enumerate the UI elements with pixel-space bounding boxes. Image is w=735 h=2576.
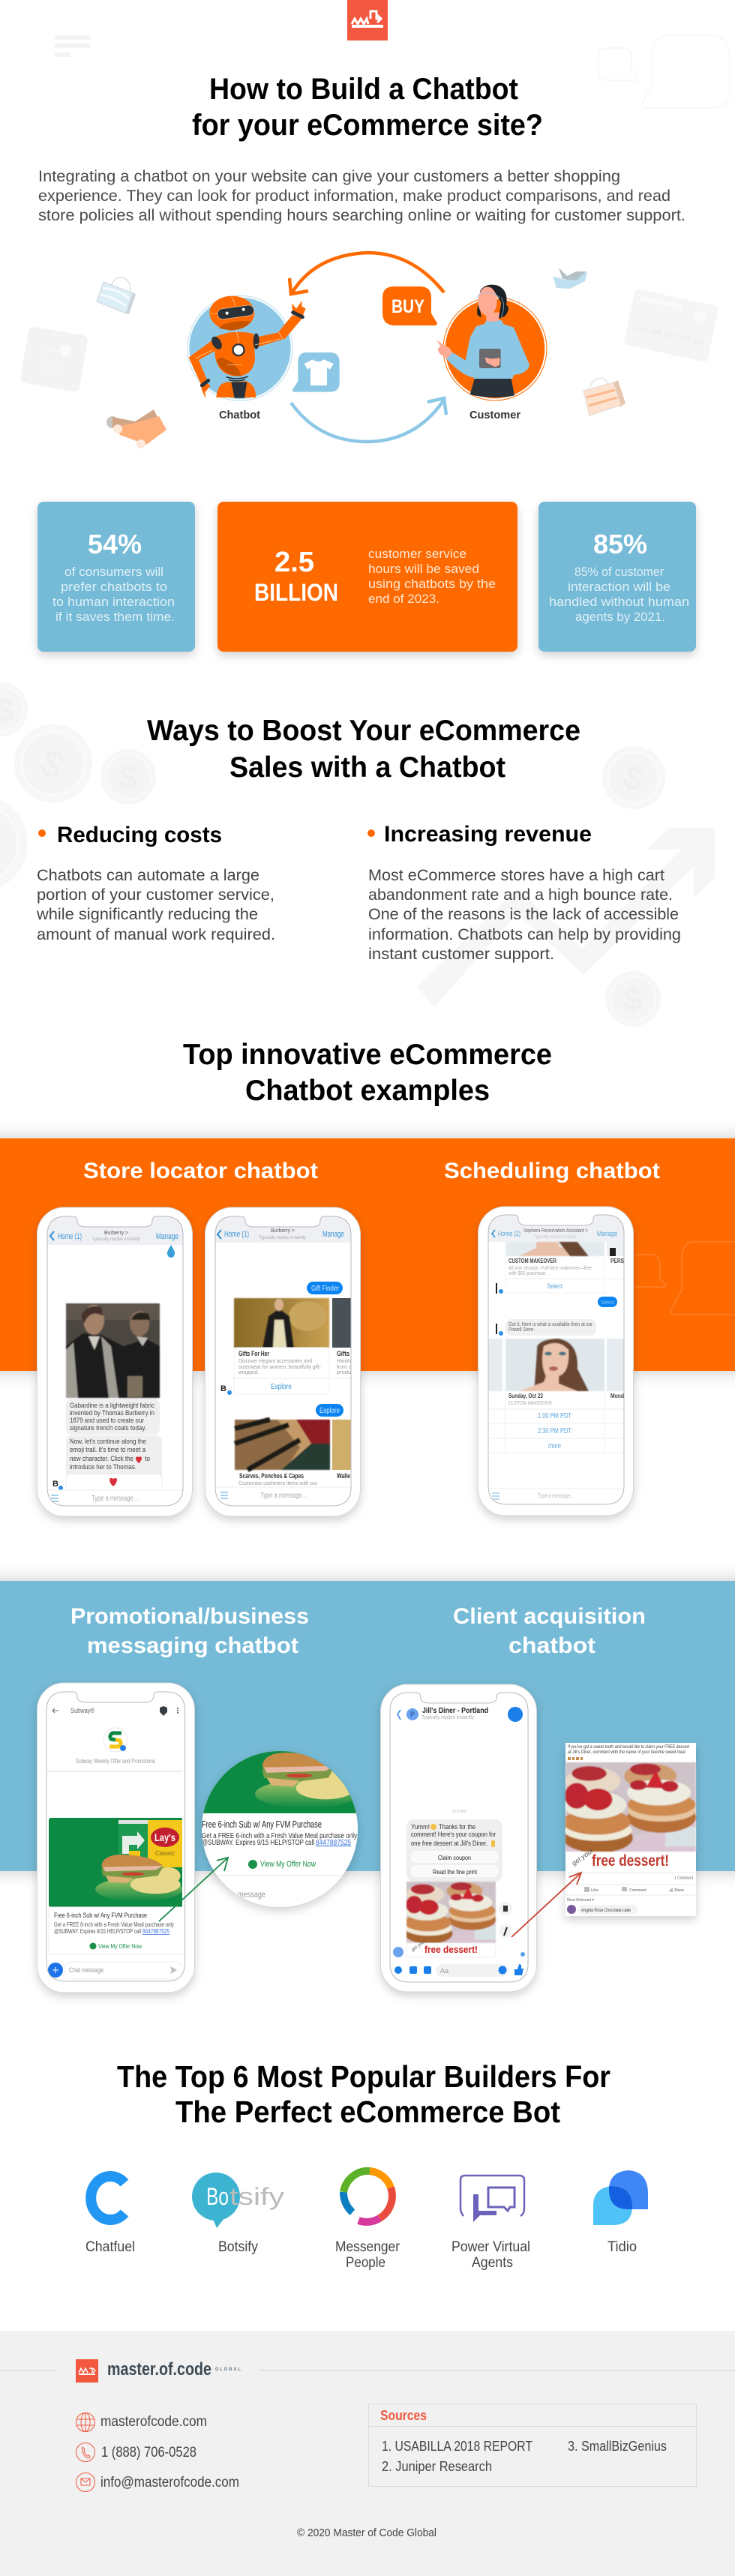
heading: ways to boost: Ways to Boost Your eCommerce xyxy=(147,715,580,747)
phone: store locator 1: Type a message... xyxy=(92,1495,138,1503)
phone: scheduling: 45 min session. Full-face makeover—free xyxy=(508,1266,592,1271)
phone: store locator 1 xyxy=(38,1207,192,1516)
contact: phone: 1 (888) 706-0528 xyxy=(101,2445,196,2461)
chatbot illustration xyxy=(188,295,306,400)
phone: client acquisition: Typically replies instantly xyxy=(422,1714,474,1720)
facebook post card: Comment xyxy=(629,1888,646,1893)
column: increasing revenue: Increasing revenue xyxy=(384,822,592,847)
orange band xyxy=(0,1138,735,1371)
phone: store locator 2 xyxy=(206,1207,360,1516)
photo: gifts for her xyxy=(234,1298,329,1348)
arrow: orange from customer to chatbot xyxy=(290,253,444,294)
blue band xyxy=(0,1581,735,1871)
heading: top 6 builders: The Top 6 Most Popular Builders For xyxy=(117,2059,610,2094)
decorative coins xyxy=(0,682,665,1027)
phone: scheduling: Typically replies instantly xyxy=(534,1235,577,1240)
phone: client acquisition: 10:50 AM xyxy=(452,1810,466,1814)
phone: client acquisition: Yumm! xyxy=(411,1823,430,1831)
copyright: © 2020 Master of Code Global xyxy=(297,2527,436,2539)
builder: Tidio: Tidio xyxy=(608,2239,637,2255)
phone: subway promotion: Free 6-inch Sub w/ Any FVM Purchase xyxy=(54,1912,147,1919)
heading: client acquisition chatbot: Client acquisition xyxy=(453,1604,646,1629)
phone: scheduling: Sephora Reservation Assistant > xyxy=(524,1228,588,1234)
contact: email: info@masterofcode.com xyxy=(100,2475,239,2491)
heading: top innovative xyxy=(183,1039,552,1107)
facebook post card: Angela Rose Chocolate cake xyxy=(581,1908,631,1913)
icon: cart tile xyxy=(20,326,88,392)
promo image: Lay's xyxy=(154,1831,176,1843)
photo: two men xyxy=(66,1303,160,1398)
sources box: 1. USABILLA 2018 REPORT xyxy=(382,2439,532,2454)
label: customer: Customer xyxy=(470,409,520,421)
phone: store locator 2: wrapped. xyxy=(238,1369,259,1375)
contact: website: masterofcode.com xyxy=(100,2414,207,2430)
phone: store locator 2: Walle xyxy=(337,1472,350,1480)
decorative coins: $ xyxy=(119,760,137,796)
phone: client acquisition xyxy=(381,1684,537,1992)
phone: store locator 1: signature trench coats today. xyxy=(70,1424,146,1432)
icon: orange handshake xyxy=(106,409,166,448)
stat card: 54% xyxy=(38,502,195,652)
heading: ways to boost xyxy=(147,715,580,784)
stat card: 54%: if it saves them time. xyxy=(56,610,175,624)
intro text xyxy=(38,168,686,224)
promo image: Classic xyxy=(155,1850,175,1857)
facebook post card: 1 Comment xyxy=(674,1876,693,1881)
stat card: 85%: 85% of customer xyxy=(574,565,664,579)
icon: orange shopping bag xyxy=(584,378,626,415)
arrow: blue from chatbot to customer xyxy=(291,398,446,442)
contact: website xyxy=(76,2413,207,2431)
phone: store locator 1: invented by Thomas Burberry in xyxy=(70,1409,154,1417)
heading: promotional messaging chatbot: messaging chatbot xyxy=(87,1633,298,1658)
title: for your eCommerce site? xyxy=(192,109,543,142)
phone: scheduling: more xyxy=(548,1442,561,1450)
phone: scheduling: Mond xyxy=(610,1393,624,1399)
phone: subway promotion: @SUBWAY. Expires 9/15 HELP/STOP call xyxy=(54,1928,141,1935)
phone: subway promotion: Subway® xyxy=(70,1707,94,1714)
phone: store locator 2: Customise cashmere items with our xyxy=(238,1480,317,1486)
phone: store locator 2: Explore xyxy=(271,1383,292,1391)
phone: client acquisition: Claim coupon xyxy=(438,1854,471,1861)
phone: client acquisition: one free dessert at Jill's Diner. xyxy=(411,1840,488,1847)
phone: client acquisition: get your xyxy=(411,1939,428,1953)
phone: store locator 1: Gabardine is a lightweight fabric xyxy=(70,1402,154,1410)
photo: model face xyxy=(488,1339,624,1391)
decorative lines icon xyxy=(55,35,91,57)
phone: scheduling: Sunday, Oct 23 xyxy=(508,1393,543,1399)
phone: subway promotion: Get a FREE 6-inch with a Fresh Value Meal purchase only xyxy=(54,1921,174,1928)
facebook post card: get your xyxy=(570,1846,596,1867)
column: increasing revenue: information. Chatbots can help by providing xyxy=(368,926,681,943)
phone: store locator 1: Home (1) xyxy=(58,1232,82,1241)
heading: client acquisition chatbot: chatbot xyxy=(508,1633,596,1658)
phone: subway promotion: Subway Weekly Offer and Promotions xyxy=(76,1758,155,1765)
stat card: 2.5 billion xyxy=(218,502,518,652)
heading: store locator chatbot: Store locator chatbot xyxy=(83,1159,318,1183)
phone: client acquisition: P xyxy=(410,1711,415,1718)
phone: client acquisition: free dessert! xyxy=(424,1944,478,1955)
phone: store locator 2: Explore xyxy=(320,1407,340,1415)
decorative speech bubbles xyxy=(598,35,730,108)
column: reducing costs xyxy=(36,823,275,943)
stat card: 85%: handled without human xyxy=(549,595,689,609)
phone: store locator 1: Manage xyxy=(156,1232,178,1241)
phone: scheduling: PERS xyxy=(610,1258,625,1264)
decorative coins: $ xyxy=(617,758,650,799)
phone: store locator 2: B xyxy=(220,1384,226,1393)
stat card: 2.5 billion: end of 2023. xyxy=(368,592,440,606)
customer illustration xyxy=(436,285,547,400)
phone: scheduling: CUSTOM MAKEOVER xyxy=(508,1258,556,1264)
phone: store locator 1: Burberry > xyxy=(104,1229,129,1236)
stat card: 85%: agents by 2021. xyxy=(575,610,665,624)
phone: scheduling: 2:30 PM PDT xyxy=(538,1427,572,1435)
stat card: 85%: 85% xyxy=(593,529,647,559)
photo: top model xyxy=(506,1242,604,1256)
phone: subway promotion: 8447887525 xyxy=(142,1928,170,1935)
column: reducing costs: Chatbots can automate a large xyxy=(37,867,260,884)
stat card: 2.5 billion: BILLION xyxy=(254,579,338,606)
facebook post card: free dessert! xyxy=(592,1852,669,1870)
BUY speech bubble xyxy=(382,286,437,325)
facebook post card: at Jill's Diner, comment with the name of your favorite sweet treat xyxy=(568,1750,686,1755)
icon: blue handshake xyxy=(553,268,587,289)
phone: scheduling: Select xyxy=(601,1300,614,1306)
builder: Botsify: tsify xyxy=(230,2183,284,2210)
arrow: red xyxy=(512,1873,581,1937)
builder: Tidio xyxy=(593,2170,648,2255)
stat card: 85% xyxy=(538,502,696,652)
phone: store locator 2: Gift Finder xyxy=(311,1285,340,1293)
heading: top 6 builders: The Perfect eCommerce Bot xyxy=(176,2095,560,2129)
phone: client acquisition: Read the fine print xyxy=(433,1868,478,1876)
phone: scheduling: Home (2) xyxy=(498,1230,520,1237)
column: reducing costs: Reducing costs xyxy=(57,823,222,847)
phone: store locator 1: Typically replies instantly xyxy=(92,1237,141,1242)
phone: store locator 2: Discover elegant accessories and xyxy=(238,1357,312,1364)
builder: MessengerPeople xyxy=(335,2171,400,2271)
decorative coins: $ xyxy=(34,741,70,787)
builder: Power Virtual Agents: Power Virtual xyxy=(452,2239,530,2255)
column: increasing revenue: abandonment rate and a high bounce rate. xyxy=(368,886,673,904)
builder: Chatfuel xyxy=(86,2176,135,2255)
phone: store locator 1: emoji trail. It's time to meet a xyxy=(70,1446,146,1454)
footer panel xyxy=(0,2331,735,2576)
builder: Power Virtual Agents: Agents xyxy=(472,2255,513,2271)
facebook post card: Share xyxy=(674,1888,684,1893)
column: increasing revenue: Most eCommerce stores have a high cart xyxy=(368,867,664,884)
stat card: 2.5 billion: customer service xyxy=(368,547,466,561)
arrow: green xyxy=(159,1858,228,1921)
footer logo xyxy=(76,2359,241,2383)
phone: client acquisition: Jill's Diner - Portland xyxy=(422,1707,488,1715)
zoom callout circle xyxy=(195,1747,364,1907)
contact: email xyxy=(76,2473,239,2491)
BUY speech bubble: BUY xyxy=(392,296,424,317)
stat card: 2.5 billion: using chatbots by the xyxy=(368,577,496,591)
contact: phone xyxy=(76,2443,196,2461)
facebook post card: Most Relevant ▾ xyxy=(567,1898,594,1903)
builder: MessengerPeople: People xyxy=(346,2255,386,2271)
phone: subway promotion xyxy=(38,1683,195,1993)
zoom callout circle: Free 6-inch Sub w/ Any FVM Purchase xyxy=(202,1819,322,1830)
sources box: Sources xyxy=(380,2408,427,2423)
phone: store locator 2: Manage xyxy=(322,1230,344,1239)
phone: scheduling xyxy=(478,1207,633,1516)
stat card: 54%: prefer chatbots to xyxy=(61,580,167,594)
phone: scheduling: Got it. Here is what is available then at our xyxy=(508,1321,592,1327)
column: increasing revenue xyxy=(368,822,681,963)
decorative bubbles on orange xyxy=(634,1242,735,1315)
footer logo: master.of.code xyxy=(107,2359,212,2380)
column: increasing revenue: instant customer support. xyxy=(368,946,554,963)
builder: Botsify xyxy=(192,2173,284,2255)
phone: store locator 1: 1879 and used to create our xyxy=(70,1417,144,1425)
phone: store locator 2: Hands xyxy=(337,1357,351,1364)
phone: store locator 2: Type a message... xyxy=(260,1492,307,1500)
phone: scheduling: Powell Store. xyxy=(508,1326,535,1333)
phone: store locator 1: to xyxy=(145,1455,150,1463)
phone: store locator 1: Now, let's continue along the xyxy=(70,1438,146,1446)
phone: store locator 1: B xyxy=(52,1480,58,1489)
icon: subway logo xyxy=(104,1728,128,1752)
stat card: 54%: of consumers will xyxy=(64,565,164,579)
zoom callout circle: View My Offer Now xyxy=(260,1860,316,1869)
builder: Power Virtual Agents xyxy=(452,2176,530,2271)
decorative coins: $ xyxy=(624,982,642,1018)
phone: scheduling: 1:00 PM PDT xyxy=(538,1412,572,1420)
phone: store locator 2: from c xyxy=(337,1363,351,1370)
decorative growth arrow xyxy=(417,828,715,1007)
header logo xyxy=(347,0,388,40)
phone: store locator 2: Home (1) xyxy=(224,1230,249,1239)
photo: scarves xyxy=(235,1420,330,1470)
phone: scheduling: CUSTOM MAKEOVER xyxy=(508,1401,552,1406)
t-shirt speech bubble xyxy=(292,352,340,392)
title: How to Build a Chatbot xyxy=(209,73,518,106)
facebook post card: Like xyxy=(591,1888,598,1893)
zoom callout circle: message xyxy=(238,1889,266,1900)
icon: credit card: 124 456 367 789 123 xyxy=(634,324,705,346)
phone: store locator 2: produ xyxy=(337,1369,351,1375)
intro text: Integrating a chatbot on your website can give your customers a better shopping xyxy=(38,168,620,185)
promo image xyxy=(49,1818,183,1907)
builder: Botsify: Bo xyxy=(206,2183,229,2210)
phone: store locator 2: outerwear for women, beautifully gift- xyxy=(238,1363,321,1370)
phone: store locator 2: Scarves, Ponchos & Capes xyxy=(239,1472,304,1480)
stat card: 2.5 billion: hours will be saved xyxy=(368,562,479,576)
sources box: 2. Juniper Research xyxy=(382,2459,492,2474)
builder: MessengerPeople: Messenger xyxy=(335,2239,400,2255)
phone: client acquisition: Thanks for the xyxy=(439,1823,476,1831)
footer logo: GLOBAL xyxy=(215,2368,241,2372)
stat card: 54%: to human interaction xyxy=(52,595,175,609)
stat card: 54%: 54% xyxy=(88,529,142,559)
phone: store locator 2: Gifts xyxy=(337,1350,350,1357)
heading: promotional messaging chatbot xyxy=(70,1604,309,1658)
intro text: experience. They can look for product information, make product comparisons, and read xyxy=(38,187,670,205)
heading: scheduling chatbot: Scheduling chatbot xyxy=(444,1159,660,1183)
zoom callout circle: Get a FREE 6-inch with a Fresh Value Meal purchase only xyxy=(202,1831,358,1840)
sources box xyxy=(368,2404,696,2487)
column: reducing costs: while significantly reducing the xyxy=(36,906,258,923)
phone: subway promotion: View My Offer Now xyxy=(98,1943,142,1950)
phone: scheduling: Select xyxy=(547,1282,562,1290)
title xyxy=(192,73,543,142)
facebook post card xyxy=(562,1743,696,1916)
phone: scheduling: with $50 purchase. xyxy=(508,1271,547,1276)
stat card: 2.5 billion: 2.5 xyxy=(274,547,314,578)
stat card: 85%: interaction will be xyxy=(568,580,670,594)
heading: promotional messaging chatbot: Promotional/business xyxy=(70,1604,309,1629)
sources box: 3. SmallBizGenius xyxy=(568,2439,667,2454)
zoom callout circle: @SUBWAY. Expires 9/15 HELP/STOP call xyxy=(202,1838,314,1847)
label: chatbot: Chatbot xyxy=(219,409,260,421)
heading: client acquisition chatbot xyxy=(453,1604,646,1658)
builder: Chatfuel: Chatfuel xyxy=(86,2239,135,2255)
zoom callout circle: 8447887525 xyxy=(316,1838,351,1847)
heading: top innovative: Top innovative eCommerce xyxy=(183,1039,552,1071)
phone: scheduling: Manage xyxy=(597,1230,617,1237)
phone: store locator 2: Burberry > xyxy=(271,1227,296,1234)
icon: credit card xyxy=(623,289,719,362)
phone: store locator 1: new character. Click the xyxy=(70,1455,134,1463)
phone: client acquisition: Aa xyxy=(440,1967,448,1975)
column: reducing costs: amount of manual work required. xyxy=(37,926,275,943)
phone: scheduling: Type a message... xyxy=(538,1492,574,1499)
column: reducing costs: portion of your customer service, xyxy=(37,886,274,904)
phone: store locator 1: introduce her to Thomas. xyxy=(70,1463,136,1471)
heading: top 6 builders xyxy=(117,2059,610,2129)
icon: blue shopping bag xyxy=(97,277,136,314)
phone: store locator 2: Typically replies instantly xyxy=(259,1235,307,1240)
builder: Botsify: Botsify xyxy=(218,2239,258,2255)
phone: client acquisition: comment! Here's your coupon for xyxy=(411,1831,496,1838)
facebook post card: If you've got a sweet tooth and would like to claim your FREE dessert xyxy=(568,1744,689,1750)
column: increasing revenue: One of the reasons is the lack of accessible xyxy=(368,906,679,923)
intro text: store policies all without spending hours searching online or waiting for customer support. xyxy=(38,207,686,224)
phone: store locator 2: Gifts For Her xyxy=(238,1350,269,1357)
heading: ways to boost: Sales with a Chatbot xyxy=(230,751,506,784)
phone: subway promotion: Chat message xyxy=(69,1966,104,1974)
heading: top innovative: Chatbot examples xyxy=(245,1075,490,1107)
